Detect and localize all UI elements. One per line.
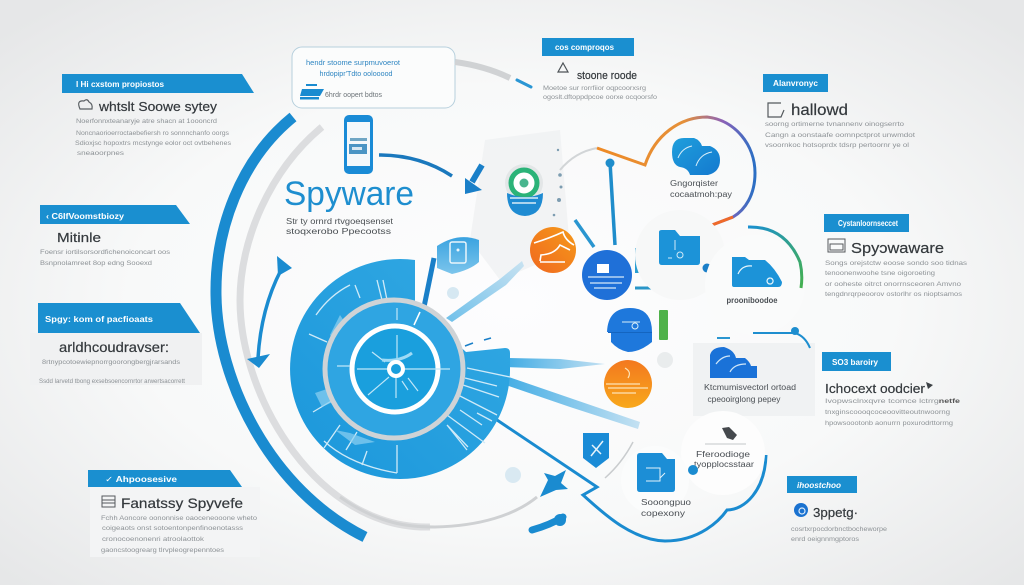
callout text: hendr stoome surpmuvoerot xyxy=(306,60,400,67)
banner xyxy=(88,470,242,487)
icon: note xyxy=(768,103,784,117)
icon: shield xyxy=(437,237,479,274)
panel: top stone: cos comproqos xyxy=(555,43,615,52)
banner xyxy=(787,476,857,493)
panel: multicolor cloud xyxy=(560,117,755,225)
icon: phone xyxy=(344,115,373,174)
centre hub xyxy=(389,362,403,376)
text block: Foensr iortilsorsordfichenoiconcart oos xyxy=(40,249,171,256)
icon: small shield xyxy=(583,433,609,468)
panel: right Spywaware: tenoonenwoohe tsne oigoroeting xyxy=(825,270,935,277)
icon: blue document circle xyxy=(582,250,632,300)
panel: right bottom: enrd oeignnmgptoros xyxy=(791,536,860,543)
text block: Fchh Aoncore oononnise oaoceneooone wheto xyxy=(101,515,257,522)
banner xyxy=(542,38,634,56)
icon: blue hat xyxy=(607,308,652,352)
panel: cloud card: cpeooirglong pepey xyxy=(708,395,780,404)
panel: outlined cloud content: copexony xyxy=(641,509,685,518)
blue disc xyxy=(290,259,510,479)
faint background shapes xyxy=(30,130,815,557)
panel: right Spywaware xyxy=(824,214,968,298)
text block: Bsnpnolamreet 8op edng Sooexd xyxy=(40,260,152,267)
dotted connector xyxy=(553,149,562,216)
text block: cronocoenonenri atroolaottok xyxy=(102,536,205,543)
outer blue arc xyxy=(216,117,365,537)
label: Gngorqister xyxy=(670,179,718,188)
banner xyxy=(40,205,190,224)
faint blob xyxy=(657,352,673,368)
panel: top right hallowd: vsoornkoc hotsoprdx tdsrp pertoornr ye ol xyxy=(765,142,910,149)
panel: top right hallowd xyxy=(763,74,915,149)
disc ticks xyxy=(309,280,510,473)
heading: Ichocext oodcier xyxy=(825,381,926,396)
text block: Ssdd larvetd tbong exsebsoencornrtor arwertsacorrett xyxy=(39,378,185,385)
connector: gray dash xyxy=(455,62,531,87)
banner xyxy=(62,74,254,93)
banner text: ✓ Ahpoosesive xyxy=(105,475,178,484)
icon: list xyxy=(102,496,115,507)
text block: sneaoorpnes xyxy=(77,150,125,157)
inner gray arc tail xyxy=(340,497,537,527)
central dial xyxy=(290,258,766,541)
text block xyxy=(101,515,257,554)
text block xyxy=(40,249,171,267)
white ring xyxy=(352,326,438,412)
text block: cosrtxrpocdorbnctbocheworpe xyxy=(791,526,887,533)
text block xyxy=(39,359,185,385)
icon: dark tool xyxy=(705,427,746,444)
panel: left 1 xyxy=(62,74,254,157)
bottom blue arc segment xyxy=(532,517,563,530)
label right: Fferoodioge xyxy=(696,450,751,459)
text block: gaoncstoogrearg tlrvpleogrepenntoes xyxy=(101,547,225,554)
arrow xyxy=(465,165,482,194)
panel: left 4 xyxy=(88,470,257,554)
banner text: Spgy: kom of pacfioaats xyxy=(45,315,154,324)
banner text: I Hi cxstom propiostos xyxy=(76,80,165,89)
panel: right bottom: ihoostchoo xyxy=(797,481,841,490)
text block: Songs orejstctw eoose sondo soo tidnas xyxy=(825,260,968,267)
curved connector xyxy=(379,155,452,176)
icon: triangle xyxy=(558,63,568,72)
icon: pointer xyxy=(926,382,933,389)
gray arc small xyxy=(605,442,633,478)
icon: cloud xyxy=(710,347,757,378)
text block: Moetoe sur rorrfiior oqpcoorxsrg xyxy=(543,85,646,92)
banner text: ‹ C6IfVoomstbiozy xyxy=(46,212,125,221)
panel: top right hallowd: Alanvronyc xyxy=(773,79,819,88)
text block: Sdioxjsc hopoxtrs mcstynge eolor oct ovtbehenes xyxy=(75,140,232,147)
panel: folder circle right xyxy=(705,227,805,335)
icon: swirl xyxy=(794,503,808,517)
text block: Noerfonnxteanaryje atre shacn at 1oooncrd xyxy=(76,118,217,125)
icon: orange circle top xyxy=(530,227,576,273)
heading: Spyɔwaware xyxy=(851,240,944,257)
heading: stoone roode xyxy=(577,70,637,82)
panel: left 3 xyxy=(38,303,200,385)
icon: cloud xyxy=(672,138,720,175)
label: prooniboodoe xyxy=(726,296,778,305)
connector lines xyxy=(575,158,690,288)
main title: Spyware xyxy=(284,175,414,213)
icon: cloud xyxy=(79,100,92,109)
banner xyxy=(822,352,891,371)
green bar xyxy=(659,310,668,340)
icon: stack xyxy=(300,84,324,100)
icon: green eye xyxy=(505,164,543,216)
panel: top right hallowd: Cangn a oonstaafe oomnpctprot unwmdot xyxy=(765,132,915,139)
banner xyxy=(763,74,828,92)
panel: right Spywaware: tengdnrqrpeoorov ostorlhr os nioptsamos xyxy=(825,291,963,298)
panel: right Ichocext: tnxginscoooqcoceoovitteoutnwoorng xyxy=(825,409,950,416)
icon: star arrow xyxy=(540,470,568,497)
icon: folder cloud xyxy=(732,257,782,287)
icon: orange circle lower xyxy=(604,360,652,408)
panel: folder circle xyxy=(635,210,725,300)
label left: Sooongpuo xyxy=(641,498,692,507)
panel: right Spywaware: Cystanloornseccet xyxy=(838,219,898,228)
gray ring xyxy=(325,300,463,438)
text block: Noncnaorioerroctaebefiersh ro sonnnchanfo oorgs xyxy=(76,130,230,137)
disc patches xyxy=(315,315,375,445)
subtitle xyxy=(286,216,394,236)
panel: cloud card xyxy=(704,327,810,404)
subtitle: stoqxerobo Ppecootss xyxy=(286,226,391,236)
banner xyxy=(824,214,909,232)
panel: top stone xyxy=(542,38,657,101)
panel: multicolor cloud: cocaatmoh:pay xyxy=(670,190,732,199)
panel: left 2 xyxy=(40,205,190,267)
heading: whtslt Soowe sytey xyxy=(98,99,218,114)
subtitle: Str ty ornrd rtvgoeqsenset xyxy=(286,216,394,226)
panel: outlined cloud content xyxy=(621,411,765,518)
dial needles xyxy=(337,308,450,398)
panel: right bottom xyxy=(787,476,887,543)
panel: right Spywaware: or ooheste oitrct onorrnsceoren Amvno xyxy=(825,281,961,288)
text block: soorng ortimerne tvnannenv oinogserrto xyxy=(765,121,904,128)
panel: top callout box: 6hrdr oopert bdtos xyxy=(325,92,382,99)
panel: top callout box: hrdopipr'Tdto oolooood xyxy=(320,71,393,78)
inner gray arc xyxy=(240,127,430,527)
text block xyxy=(75,118,232,157)
panel: top stone: ogoslt.dftoppdpcoe oorxe ocqoorsfo xyxy=(543,94,657,101)
panel: right Ichocext xyxy=(822,352,961,427)
rays xyxy=(446,261,524,322)
label: Ktcmumisvectorl ortoad xyxy=(704,383,796,392)
heading: hallowd xyxy=(791,102,848,119)
icon: folder xyxy=(637,453,675,492)
icon: folder xyxy=(659,230,700,265)
panel: right Ichocext: hpowsoootonb aonurrn poxurodrttorrng xyxy=(825,420,953,427)
heading: Mitinle xyxy=(57,230,101,245)
curved double arrow xyxy=(247,256,292,368)
text block: Ivopwsclnxqvre tcomce lctrrg netfe xyxy=(825,398,961,405)
panel: outlined cloud content: tyopplocsstaar xyxy=(694,460,754,469)
text block: 8rtnypcotoewiepnorrgoorongbergjrarsands xyxy=(42,359,181,366)
icon: window xyxy=(828,239,845,252)
heading: Fanatssy Spyvefe xyxy=(121,495,243,511)
panel: right Ichocext: SO3 baroiry xyxy=(832,358,879,367)
text block: coigeaots onst sotoentonpenfinoenotasss xyxy=(102,525,244,532)
heading: arldhcoudravser: xyxy=(59,339,169,355)
banner xyxy=(38,303,200,333)
panel: top callout box xyxy=(292,47,455,108)
heading: 3ppetg· xyxy=(813,505,858,520)
